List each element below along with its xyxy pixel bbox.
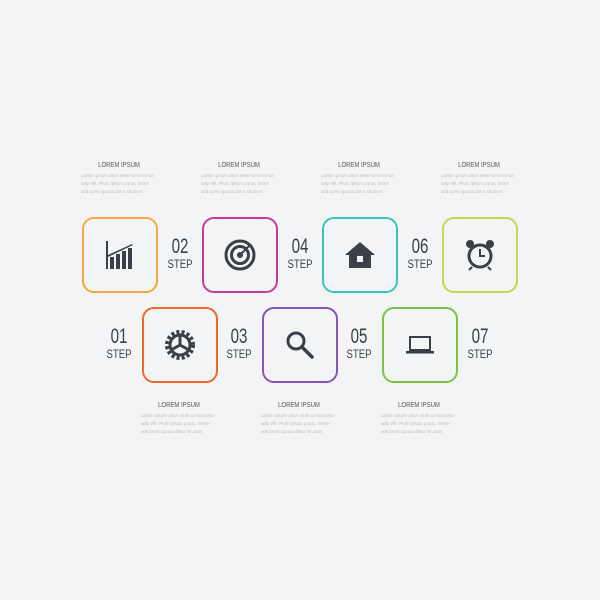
step 02 <box>167 235 193 271</box>
text block: bottom 1: LOREM IPSUM <box>158 402 200 409</box>
step 07 <box>467 325 493 361</box>
step 07: STEP <box>467 347 493 361</box>
box: target icon <box>202 217 278 293</box>
text block: top 2: Lorem ipsum dolor amet consectetur adip elit. Proin ipsum purus, lorem sed lorem ipsum dolor sit amet <box>201 173 274 194</box>
text block: bottom 3 <box>381 402 454 434</box>
step 01: STEP <box>106 347 132 361</box>
text block: top 1: Lorem ipsum dolor amet consectetur adip elit. Proin ipsum purus, lorem sed lorem ipsum dolor sit amet <box>81 173 154 194</box>
step 03 <box>226 325 252 361</box>
box: house icon <box>322 217 398 293</box>
step 06: 06 <box>412 235 428 258</box>
text block: bottom 2: Lorem ipsum dolor amet consectetur adip elit. Proin ipsum purus, lorem sed lorem ipsum dolor sit amet <box>261 413 334 434</box>
step 06 <box>407 235 433 271</box>
box: gear icon <box>142 307 218 383</box>
text block: bottom 3: Lorem ipsum dolor amet consectetur adip elit. Proin ipsum purus, lorem sed lorem ipsum dolor sit amet <box>381 413 454 434</box>
text block: top 3 <box>321 162 394 194</box>
step 01: 01 <box>111 325 127 348</box>
text block: bottom 3: LOREM IPSUM <box>398 402 440 409</box>
text block: top 1: LOREM IPSUM <box>98 162 140 169</box>
step 05: 05 <box>351 325 367 348</box>
step 05: STEP <box>346 347 372 361</box>
step 01 <box>106 325 132 361</box>
step 07: 07 <box>472 325 488 348</box>
text block: bottom 1: Lorem ipsum dolor amet consectetur adip elit. Proin ipsum purus, lorem sed lorem ipsum dolor sit amet <box>141 413 214 434</box>
text block: top 4: LOREM IPSUM <box>458 162 500 169</box>
box: chart icon <box>82 217 158 293</box>
step 02: STEP <box>167 257 193 271</box>
text block: bottom 2: LOREM IPSUM <box>278 402 320 409</box>
step 04 <box>287 235 313 271</box>
box: alarm clock icon <box>442 217 518 293</box>
text block: top 3: LOREM IPSUM <box>338 162 380 169</box>
step 02: 02 <box>172 235 188 258</box>
step 03: STEP <box>226 347 252 361</box>
box: laptop icon <box>382 307 458 383</box>
text block: top 2 <box>201 162 274 194</box>
step 03: 03 <box>231 325 247 348</box>
step 04: STEP <box>287 257 313 271</box>
text block: bottom 1 <box>141 402 214 434</box>
step 06: STEP <box>407 257 433 271</box>
step 04: 04 <box>292 235 308 258</box>
text block: top 2: LOREM IPSUM <box>218 162 260 169</box>
text block: top 3: Lorem ipsum dolor amet consectetur adip elit. Proin ipsum purus, lorem sed lorem ipsum dolor sit amet <box>321 173 394 194</box>
box: magnifier icon <box>262 307 338 383</box>
text block: top 1 <box>81 162 154 194</box>
step 05 <box>346 325 372 361</box>
text block: top 4: Lorem ipsum dolor amet consectetur adip elit. Proin ipsum purus, lorem sed lorem ipsum dolor sit amet <box>441 173 514 194</box>
text block: top 4 <box>441 162 514 194</box>
text block: bottom 2 <box>261 402 334 434</box>
